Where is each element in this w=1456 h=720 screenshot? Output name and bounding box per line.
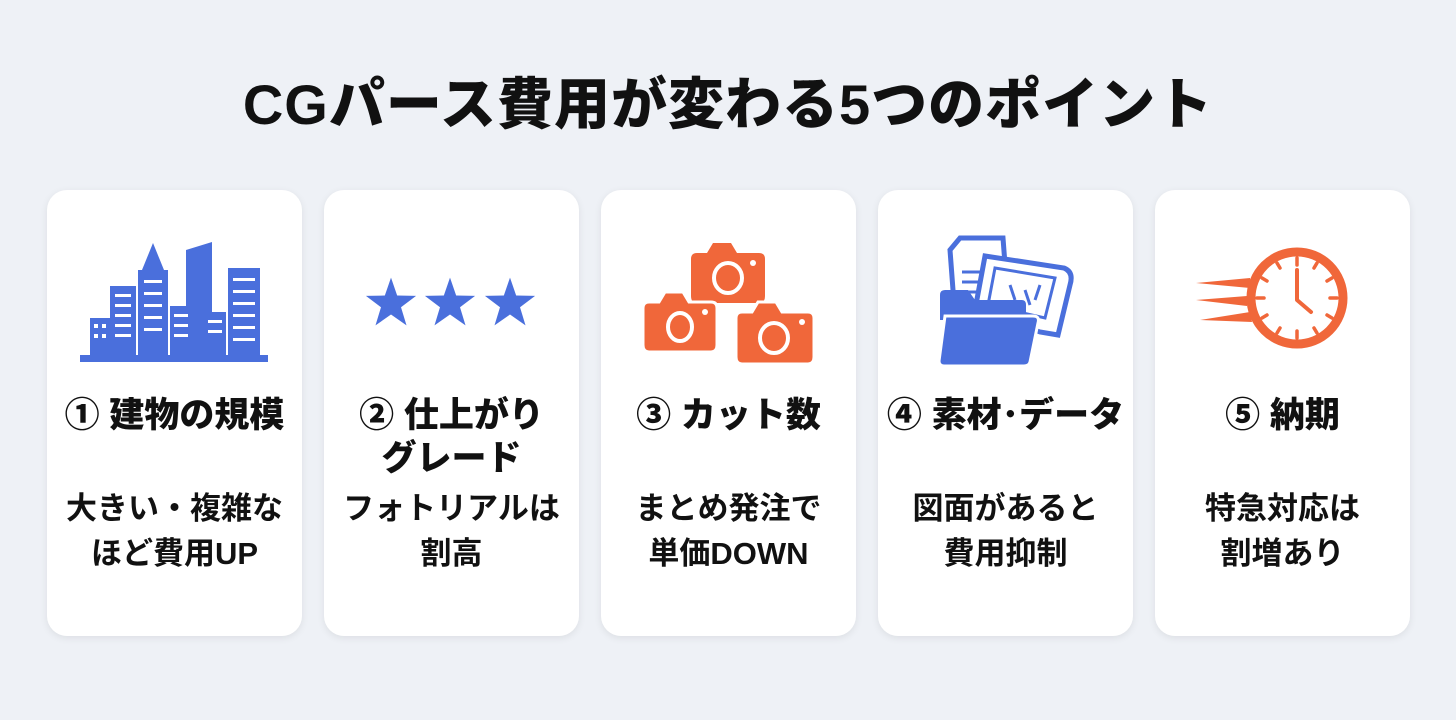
text 1: 大きい・複雑な (66, 491, 283, 526)
text 4: 図面があると (912, 491, 1098, 526)
text 3: まとめ発注で (636, 491, 822, 526)
heading 2: グレード (381, 439, 522, 478)
icon: fast clock (1196, 252, 1343, 344)
icon: buildings (80, 242, 268, 362)
text 5: 割増あり (1220, 536, 1344, 571)
text 4: 費用抑制 (944, 536, 1068, 571)
heading 2 (359, 396, 544, 478)
panel: cut count (601, 190, 856, 636)
icon: cameras (643, 243, 814, 364)
text 2 (343, 491, 560, 571)
text 1: ほど費用UP (91, 536, 258, 571)
icon: folder with documents (939, 238, 1071, 366)
heading 5: ⑤ 納期 (1225, 396, 1340, 435)
panel: finish grade (324, 190, 579, 636)
text 2: 割高 (420, 536, 482, 571)
text 2: フォトリアルは (343, 491, 560, 526)
icon: stars (366, 278, 535, 325)
panel: materials data (878, 190, 1133, 636)
heading 1: ① 建物の規模 (65, 396, 284, 435)
heading 4: ④ 素材･データ (887, 396, 1124, 435)
panel: building scale (47, 190, 302, 636)
text 3 (636, 491, 822, 571)
text 5 (1205, 491, 1360, 571)
text 3: 単価DOWN (648, 536, 809, 571)
text 5: 特急対応は (1205, 491, 1360, 526)
text 1 (66, 491, 283, 571)
title: CGパース費用が変わる5つのポイント (243, 73, 1213, 136)
text 4 (912, 491, 1098, 571)
panel: deadline (1155, 190, 1410, 636)
heading 3: ③ カット数 (636, 396, 821, 435)
heading 2: ② 仕上がり (359, 396, 544, 435)
